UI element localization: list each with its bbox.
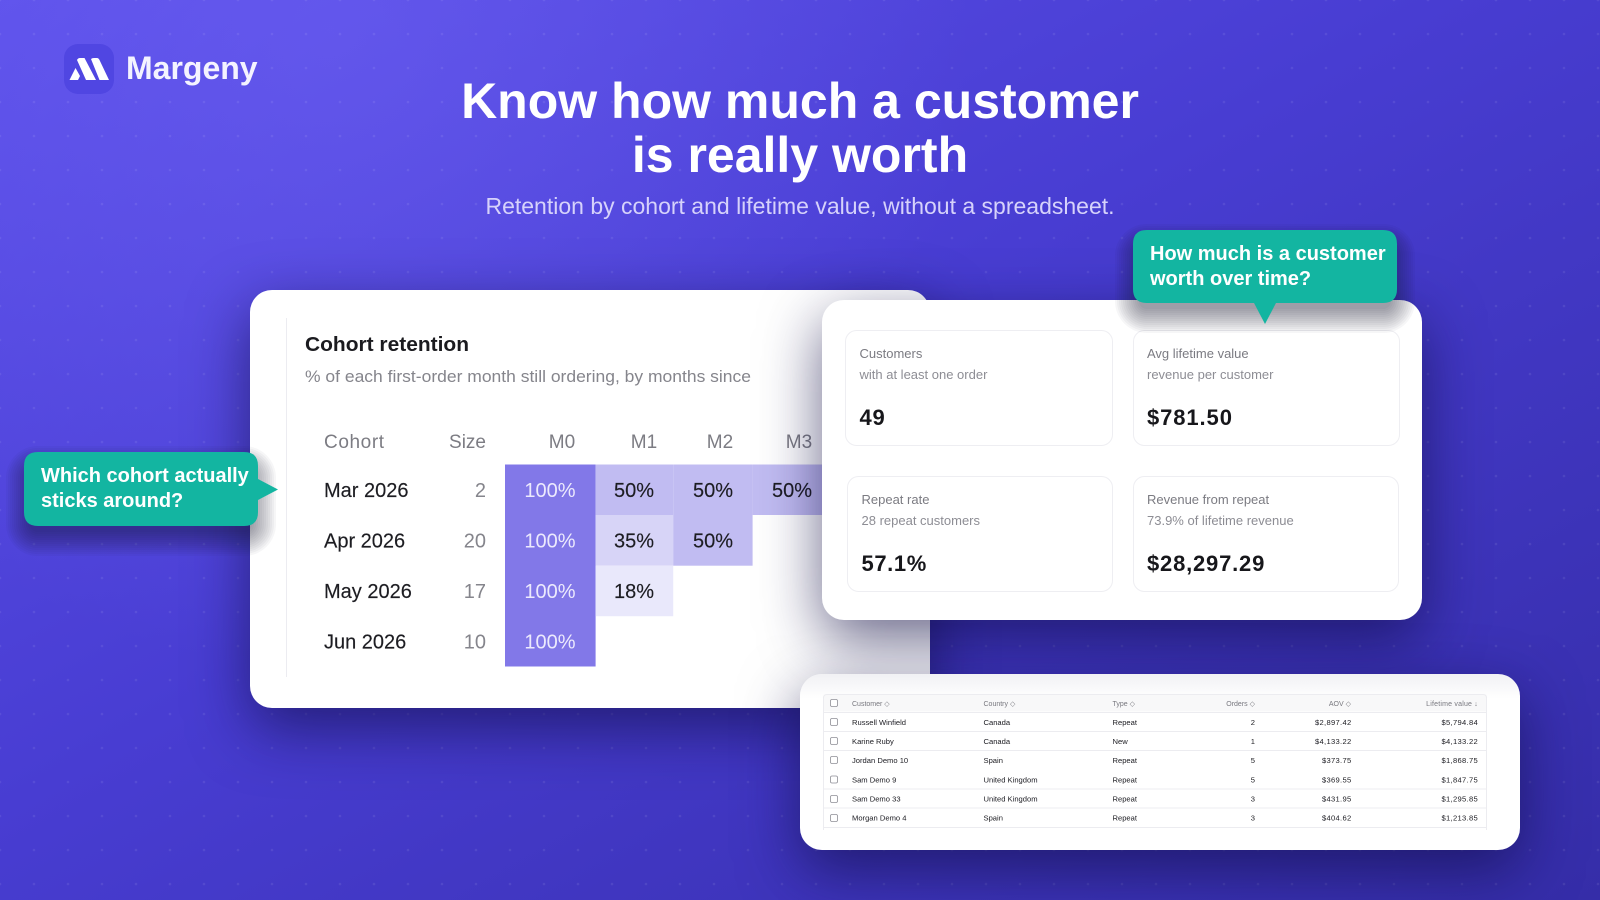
customer data table: Spain: [984, 814, 1003, 822]
customer data table: Russell Winfield: [852, 718, 906, 727]
customer data table: United Kingdom: [984, 794, 1038, 804]
stat card: customers: 49: [860, 405, 886, 430]
cohort heat table: 20: [464, 530, 486, 552]
logo wordmark: Margeny: [126, 50, 258, 86]
callout: customer worth: worth over time?: [1149, 268, 1311, 290]
customer data table: Country ◇: [984, 701, 1016, 708]
stat card: revenue from repeat: [1134, 476, 1398, 592]
customer data table: Repeat: [1112, 718, 1138, 727]
title: is really worth: [632, 127, 968, 183]
stat card: repeat rate: [848, 476, 1112, 592]
stat card: customers: [846, 330, 1112, 446]
stat card: customers: Customers: [860, 346, 923, 361]
stat card: repeat rate: Repeat rate: [862, 492, 929, 507]
callout: customer worth: How much is a customer: [1150, 243, 1386, 265]
customer data table: Repeat: [1112, 794, 1138, 804]
customer data table: Spain: [984, 756, 1003, 765]
cohort heat table: 35%: [614, 530, 654, 552]
customer data table: $431.95: [1322, 794, 1352, 804]
customer data table: Repeat: [1112, 756, 1138, 765]
customer data table: $1,847.75: [1442, 776, 1478, 784]
stat card: revenue from repeat: Revenue from repeat: [1147, 492, 1270, 507]
cohort heat table: 50%: [772, 480, 812, 502]
stat card: average lifetime value: [1134, 330, 1400, 446]
stat card: revenue from repeat: $28,297.29: [1147, 551, 1265, 576]
cohort description: % of each first-order month still ordering, by months since: [305, 367, 751, 386]
customer data table: $1,868.75: [1442, 756, 1478, 765]
customer data table: United Kingdom: [984, 776, 1038, 784]
stat card: average lifetime value: $781.50: [1147, 405, 1233, 430]
customer data table: AOV ◇: [1329, 701, 1352, 708]
customer data table: 3: [1251, 794, 1255, 804]
cohort heat table: Size: [449, 432, 486, 453]
customer data table: New: [1112, 737, 1128, 746]
customer data table: Karine Ruby: [852, 737, 894, 746]
cohort heat table: 18%: [614, 581, 654, 603]
customer data table: Canada: [984, 737, 1011, 746]
cohort heat table: 17: [464, 581, 486, 603]
cohort heat table: M2: [707, 432, 733, 453]
customer data table: Repeat: [1112, 814, 1138, 822]
cohort heat table: M0: [549, 432, 575, 453]
cohort heat table: [324, 432, 833, 666]
cohort heat table: 10: [464, 632, 486, 654]
cohort heat table: 100%: [524, 581, 576, 603]
stat card: repeat rate: 28 repeat customers: [862, 513, 981, 528]
customer data table: Lifetime value ↓: [1426, 701, 1478, 708]
cohort heat table: 50%: [614, 480, 654, 502]
customer data table: 3: [1251, 814, 1255, 822]
customer data table: Type ◇: [1112, 701, 1136, 708]
stat card: customers: with at least one order: [858, 367, 988, 382]
title: Know how much a customer: [461, 73, 1139, 129]
callout: which cohort: Which cohort actually: [41, 465, 250, 487]
cohort heat table: 50%: [693, 530, 733, 552]
logo: [64, 44, 258, 94]
customer data table: Morgan Demo 4: [852, 814, 906, 822]
panel: stats: [822, 300, 1422, 620]
cohort heat table: May 2026: [324, 581, 412, 603]
customer data table: $4,133.22: [1442, 737, 1478, 746]
customer data table: $1,213.85: [1442, 814, 1478, 822]
subtitle: Retention by cohort and lifetime value, without a spreadsheet.: [485, 193, 1115, 219]
cohort heat table: Apr 2026: [324, 530, 405, 552]
customer data table: $1,295.85: [1442, 794, 1478, 804]
stat card: average lifetime value: Avg lifetime value: [1147, 346, 1249, 361]
customer data table: Customer ◇: [852, 701, 890, 708]
customer data table: $373.75: [1322, 756, 1352, 765]
cohort heat table: Mar 2026: [324, 480, 408, 502]
cohort heading: Cohort retention: [305, 334, 469, 356]
cohort heat table: Jun 2026: [324, 632, 406, 654]
customer data table: 2: [1251, 718, 1255, 727]
customer data table: [824, 694, 1486, 830]
customer data table: 5: [1251, 756, 1255, 765]
stat card: repeat rate: 57.1%: [862, 551, 927, 576]
icon: logo mark: [64, 44, 114, 94]
customer data table: Canada: [984, 718, 1011, 727]
customer data table: $404.62: [1322, 814, 1352, 822]
customer data table: Orders ◇: [1226, 701, 1256, 708]
cohort heat table: Cohort: [324, 432, 385, 453]
customer data table: $4,133.22: [1315, 737, 1352, 746]
customer data table: 5: [1251, 776, 1255, 784]
cohort heat table: 50%: [693, 480, 733, 502]
customer data table: Jordan Demo 10: [852, 756, 908, 765]
callout: which cohort: sticks around?: [41, 490, 183, 512]
customer data table: $2,897.42: [1315, 718, 1352, 727]
callout: which cohort: [6, 446, 278, 556]
cohort heat table: M1: [631, 432, 657, 453]
panel: cohort retention: [250, 290, 930, 708]
panel: customer table: [800, 674, 1520, 850]
stat card: average lifetime value: revenue per customer: [1147, 367, 1274, 382]
cohort heat table: M3: [786, 432, 812, 453]
customer data table: $5,794.84: [1442, 718, 1478, 727]
customer data table: Repeat: [1112, 776, 1138, 784]
customer data table: $369.55: [1322, 776, 1352, 784]
customer data table: 1: [1251, 737, 1255, 746]
cohort heat table: 100%: [524, 480, 576, 502]
customer data table: Sam Demo 9: [852, 776, 896, 784]
customer data table: Sam Demo 33: [852, 794, 901, 804]
cohort heat table: 100%: [524, 530, 576, 552]
cohort heat table: 100%: [524, 632, 576, 654]
stat card: revenue from repeat: 73.9% of lifetime revenue: [1147, 513, 1294, 528]
callout: customer worth: [1115, 224, 1415, 333]
cohort heat table: 2: [475, 480, 486, 502]
